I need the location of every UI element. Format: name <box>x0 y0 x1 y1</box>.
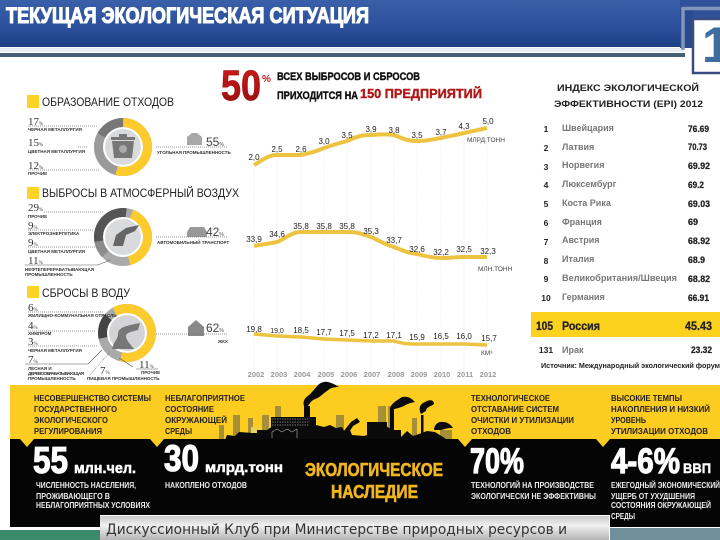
water labels: ДЕРЕВООБРАБАТЫВАЮЩАЯ <box>28 371 84 376</box>
EPI rows: 10 <box>541 293 551 303</box>
headline: 50 percent <box>221 62 482 110</box>
black base with notches <box>10 439 720 527</box>
year axis: 2006 <box>341 370 357 379</box>
headline: 50 percent: ВСЕХ ВЫБРОСОВ И СБРОСОВ <box>277 71 420 83</box>
EPI rows: Великобритания/Швеция <box>562 273 677 283</box>
water labels <box>25 302 160 381</box>
EPI rows: 8 <box>544 256 549 266</box>
line: water discharges, km3: КМ³ <box>481 350 493 357</box>
EPI highlighted row: Russia: 105 <box>536 319 553 333</box>
line: waste, billion tonnes: 4,3 <box>458 122 470 131</box>
year axis: 2009 <box>411 370 427 379</box>
water callout: housing and utilities: ЖКХ <box>217 339 228 344</box>
panel: waste generation <box>27 95 231 180</box>
EPI rows: 69.92 <box>688 161 710 171</box>
headline: 50 percent: ПРИХОДИТСЯ НА <box>277 90 358 102</box>
EPI rows: 5 <box>544 199 549 209</box>
center label: ecological legacy: ЭКОЛОГИЧЕСКОЕ <box>305 460 443 480</box>
line: waste, billion tonnes: 2,6 <box>295 145 307 154</box>
section heading: water: СБРОСЫ В ВОДУ <box>42 288 131 300</box>
line: waste, billion tonnes: 2,5 <box>271 145 283 154</box>
EPI highlighted row: Russia: 45.43 <box>685 319 712 333</box>
icon: pipe <box>112 323 140 349</box>
column 1: НЕСОВЕРШЕНСТВО СИСТЕМЫ <box>34 394 151 403</box>
column 1: 55 <box>33 440 68 481</box>
section heading: air: ВЫБРОСЫ В АТМОСФЕРНЫЙ ВОЗДУХ <box>42 187 239 200</box>
year axis: 2007 <box>364 370 380 379</box>
column 2: НАКОПЛЕНО ОТХОДОВ <box>165 481 247 490</box>
icon: smokestack <box>113 225 139 246</box>
year axis: 2011 <box>457 370 473 379</box>
bottom banner <box>10 382 720 527</box>
slide number frame <box>680 0 720 73</box>
EPI rows: Франция <box>562 217 602 227</box>
column 2: СРЕДЫ <box>165 427 192 436</box>
air labels: ЦВЕТНАЯ МЕТАЛЛУРГИЯ <box>28 249 85 254</box>
waste labels <box>28 116 99 176</box>
line: waste, billion tonnes: 2,0 <box>248 153 260 162</box>
air labels: 9% <box>28 237 38 249</box>
EPI source: Источник: Международный экологический форум <box>541 362 720 370</box>
air labels: 11% <box>28 255 43 267</box>
waste callout: coal industry: УГОЛЬНАЯ ПРОМЫШЛЕННОСТЬ <box>157 150 231 155</box>
EPI rows: Италия <box>562 254 594 264</box>
line: air emissions, million tonnes <box>246 222 513 273</box>
donut chart: water <box>94 300 160 366</box>
column 1: млн.чел. <box>74 460 136 477</box>
donut chart: waste <box>90 114 156 180</box>
city silhouette <box>219 382 453 443</box>
panel: EPI ranking <box>531 82 720 370</box>
column 3: ОТСТАВАНИЕ СИСТЕМ <box>471 405 559 414</box>
column 4: ВВП <box>683 460 711 476</box>
water callout: housing and utilities: 62% <box>206 321 224 335</box>
EPI highlighted row: Russia <box>531 312 720 337</box>
water labels: ХИМПРОМ <box>28 331 52 336</box>
line: air emissions, million tonnes: 35,3 <box>363 227 379 236</box>
EPI rows: 68.9 <box>688 255 705 265</box>
footer strips <box>0 528 720 540</box>
column 4: УТИЛИЗАЦИИ ОТХОДОВ <box>611 427 708 436</box>
line: water discharges, km3: 17,5 <box>339 329 355 338</box>
waste labels: 17% <box>28 116 43 128</box>
line: waste, billion tonnes: 3,0 <box>318 137 330 146</box>
column 4: НАКОПЛЕНИЯ И НИЗКИЙ <box>611 405 710 414</box>
line: water discharges, km3: 15,9 <box>409 333 425 342</box>
EPI rows: 9 <box>544 274 549 284</box>
headline: 50 percent: % <box>262 74 271 85</box>
center label: ecological legacy: НАСЛЕДИЕ <box>331 482 418 502</box>
year axis: 2003 <box>271 370 287 379</box>
line: waste, billion tonnes: МЛРД.ТОНН <box>467 137 505 144</box>
column 3 <box>470 394 596 501</box>
line: waste, billion tonnes: 3,5 <box>341 131 353 140</box>
column 1: ЭКОЛОГИЧЕСКОГО <box>34 416 108 425</box>
EPI rows: 69 <box>688 217 698 227</box>
water labels: 7% <box>28 354 38 366</box>
line: water discharges, km3: 16,5 <box>433 332 449 341</box>
EPI rows: 3 <box>544 162 549 172</box>
line: water discharges, km3: 17,2 <box>363 331 379 340</box>
air labels: НЕФТЕПЕРЕРАБАТЫВАЮЩАЯ <box>25 267 94 272</box>
line: waste, billion tonnes <box>248 117 505 165</box>
column 1: НЕБЛАГОПРИЯТНЫХ УСЛОВИЯХ <box>36 501 151 510</box>
section heading: water <box>27 286 131 300</box>
air callout: road transport: 42% <box>206 225 224 239</box>
water labels: 3% <box>28 336 38 348</box>
title: ТЕКУЩАЯ ЭКОЛОГИЧЕСКАЯ СИТУАЦИЯ <box>6 3 369 28</box>
EPI rows: 6 <box>544 218 549 228</box>
water labels: ЖИЛИЩНО-КОММУНАЛЬНАЯ ОТРАСЛЬ <box>27 313 117 318</box>
EPI rows: Норвегия <box>562 160 604 170</box>
column 4 <box>611 394 720 521</box>
column 2 <box>164 394 283 490</box>
EPI row: Iraq <box>539 345 712 355</box>
caption bar: Дискуссионный Клуб при Министерстве природных ресурсов и <box>106 522 567 538</box>
EPI rows: 68.82 <box>688 274 710 284</box>
column 2: ОКРУЖАЮЩЕЙ <box>165 416 227 425</box>
donut chart: air <box>88 202 158 272</box>
year axis: 2005 <box>318 370 334 379</box>
column 4: 4-6% <box>611 442 680 481</box>
column 1: РЕГУЛИРОВАНИЯ <box>34 427 102 436</box>
EPI rows: 76.69 <box>688 124 709 134</box>
line: air emissions, million tonnes: 34,6 <box>269 230 285 239</box>
line: air emissions, million tonnes: 32,5 <box>456 245 472 254</box>
EPI rows: Германия <box>562 292 605 302</box>
line: water discharges, km3: 17,7 <box>316 328 332 337</box>
air labels: 29% <box>28 202 43 214</box>
center label: ecological legacy <box>305 460 443 502</box>
EPI row: Iraq: Ирак <box>562 345 584 355</box>
EPI highlighted row: Russia: Россия <box>562 319 600 333</box>
line: water discharges, km3: 19,8 <box>246 325 262 334</box>
column 3: ЭКОЛОГИЧЕСКИ НЕ ЭФФЕКТИВНЫ <box>471 492 596 501</box>
column 3: ОЧИСТКИ И УТИЛИЗАЦИИ <box>471 416 574 425</box>
column 1: ПРОЖИВАЮЩЕГО В <box>36 492 110 501</box>
column 2: НЕБЛАГОПРИЯТНОЕ <box>165 394 246 403</box>
year axis: 2002 <box>248 370 264 379</box>
water labels: ПРОМЫШЛЕННОСТЬ <box>28 376 76 381</box>
waste labels: ЦВЕТНАЯ МЕТАЛЛУРГИЯ <box>28 149 85 154</box>
column 2: 30 <box>164 438 199 479</box>
EPI rows: Коста Рика <box>562 198 612 208</box>
waste labels: 12% <box>28 160 43 172</box>
line: air emissions, million tonnes: 35,8 <box>293 222 309 231</box>
headline: 50 percent: 150 ПРЕДПРИЯТИЙ <box>360 86 482 101</box>
column 3: ТЕХНОЛОГИЙ НА ПРОИЗВОДСТВЕ <box>471 481 595 490</box>
EPI rows: 68.92 <box>688 236 710 246</box>
section heading: waste: ОБРАЗОВАНИЕ ОТХОДОВ <box>42 97 174 109</box>
year axis <box>248 370 496 379</box>
EPI heading: ЭФФЕКТИВНОСТИ (EPI) 2012 <box>554 99 703 110</box>
waste labels: ЧЕРНАЯ МЕТАЛЛУРГИЯ <box>28 127 82 132</box>
line: waste, billion tonnes: 3,5 <box>411 131 423 140</box>
panel: water discharges <box>25 286 228 381</box>
EPI row: Iraq: 131 <box>539 345 553 355</box>
line: water discharges, km3 <box>246 325 497 357</box>
year axis: 2010 <box>434 370 450 379</box>
column 1 <box>33 394 151 510</box>
line: air emissions, million tonnes: 32,3 <box>480 247 496 256</box>
waste labels: 15% <box>28 137 43 149</box>
air callout: road transport: АВТОМОБИЛЬНЫЙ ТРАНСПОРТ <box>157 238 229 245</box>
EPI heading: ИНДЕКС ЭКОЛОГИЧЕСКОЙ <box>557 82 699 94</box>
icon: trash can <box>111 134 135 158</box>
column 4: УЩЕРБ ОТ УХУДШЕНИЯ <box>611 492 695 501</box>
EPI rows: Латвия <box>562 142 594 152</box>
line: water discharges, km3: 18,5 <box>293 326 309 335</box>
column 1: ГОСУДАРСТВЕННОГО <box>34 405 117 414</box>
line: water discharges, km3: 15,7 <box>481 334 497 343</box>
vertical grid lines <box>254 128 487 372</box>
air labels: ПРОЧИЕ <box>28 214 47 219</box>
EPI rows: 69.03 <box>688 199 710 209</box>
column 4: СРЕДЫ <box>611 512 635 521</box>
air labels: ПРОМЫШЛЕННОСТЬ <box>25 272 73 277</box>
line: waste, billion tonnes: 3,7 <box>435 128 447 137</box>
year axis: 2012 <box>480 370 496 379</box>
caption bar <box>100 516 609 540</box>
year axis: 2004 <box>294 370 311 379</box>
column 3: ТЕХНОЛОГИЧЕСКОЕ <box>471 394 551 403</box>
EPI rows: 2 <box>544 143 549 153</box>
line: water discharges, km3: 17,1 <box>386 331 402 340</box>
EPI rows: Швейцария <box>562 123 614 133</box>
EPI row: Iraq: 23.32 <box>691 345 712 355</box>
water labels: 11% <box>139 359 154 371</box>
air labels: ЭЛЕКТРОЭНЕРГЕТИКА <box>28 231 80 236</box>
water labels: 7% <box>100 365 110 377</box>
water labels: 4% <box>28 320 38 332</box>
EPI rows: Люксембург <box>562 179 617 189</box>
line: water discharges, km3: 16,0 <box>456 332 472 341</box>
line: air emissions, million tonnes: 33,7 <box>386 236 402 245</box>
water labels: ПИЩЕВАЯ ПРОМЫШЛЕННОСТЬ <box>87 376 160 381</box>
line: air emissions, million tonnes: 32,6 <box>409 245 425 254</box>
EPI rows: 7 <box>544 237 549 247</box>
line: waste, billion tonnes: 3,9 <box>365 125 377 134</box>
headline: 50 percent: 50 <box>221 62 261 110</box>
column 2: млрд.тонн <box>205 459 283 475</box>
EPI rows: 66.91 <box>688 293 709 303</box>
EPI rows: 1 <box>544 124 549 134</box>
column 3: 70% <box>470 442 524 481</box>
waste labels: ПРОЧИЕ <box>28 171 47 176</box>
air callout: road transport <box>156 225 229 245</box>
air labels: 9% <box>28 220 38 232</box>
EPI rows: 69.2 <box>688 180 704 190</box>
line: waste, billion tonnes: 3,8 <box>388 126 400 135</box>
EPI rows: 70.73 <box>688 142 707 152</box>
column 2: СОСТОЯНИЕ <box>165 405 215 414</box>
waste callout: coal industry <box>156 133 231 155</box>
line chart: emissions by year <box>246 117 513 379</box>
column 3: ОТХОДОВ <box>471 427 511 436</box>
line: air emissions, million tonnes: 33,9 <box>246 235 262 244</box>
line: air emissions, million tonnes: 32,2 <box>433 248 449 257</box>
water labels: ЧЕРНАЯ МЕТАЛЛУРГИЯ <box>28 348 82 353</box>
waste callout: coal industry: 55% <box>206 135 224 149</box>
column 4: УРОВЕНЬ <box>611 416 646 425</box>
line: air emissions, million tonnes: 35,8 <box>339 222 355 231</box>
line: air emissions, million tonnes: МЛН.ТОНН <box>478 266 513 273</box>
line: air emissions, million tonnes: 35,8 <box>316 222 332 231</box>
EPI rows: 4 <box>544 180 549 190</box>
water labels: ЛЕСНАЯ И <box>28 366 52 371</box>
air labels <box>25 202 110 277</box>
column 1: ЧИСЛЕННОСТЬ НАСЕЛЕНИЯ, <box>36 481 136 490</box>
water labels: ПРОЧИЕ <box>141 370 160 375</box>
EPI heading <box>554 82 703 110</box>
water callout: housing and utilities <box>156 320 228 344</box>
EPI rows: Австрия <box>562 235 600 245</box>
line: waste, billion tonnes: 5,0 <box>482 117 494 126</box>
EPI rows <box>541 123 710 303</box>
column 4: ВЫСОКИЕ ТЕМПЫ <box>611 394 682 403</box>
year axis: 2008 <box>388 370 404 379</box>
header band <box>0 0 685 57</box>
line: water discharges, km3: 19,0 <box>270 328 284 335</box>
panel: air emissions <box>25 187 239 277</box>
water labels: 6% <box>28 302 38 314</box>
